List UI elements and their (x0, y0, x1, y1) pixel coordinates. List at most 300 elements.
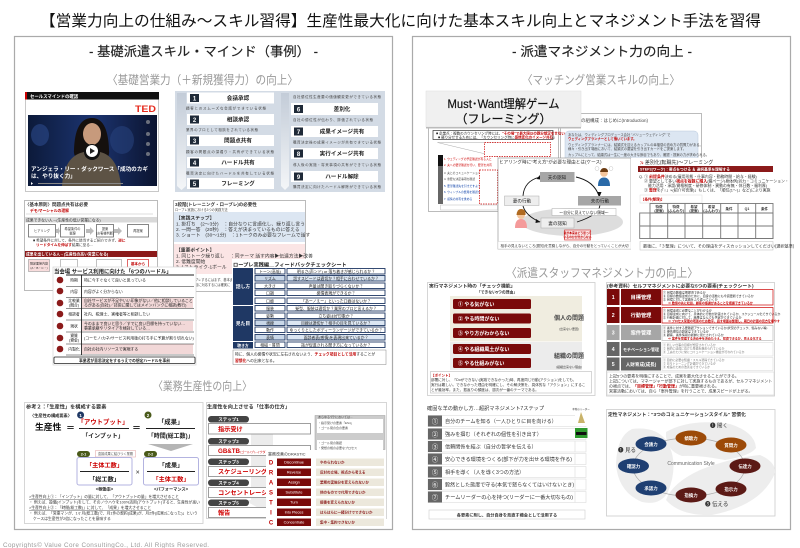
panel: role play necessity: ：同テーマ 話す内容▶伝達方法▶改善 (230, 252, 313, 260)
video thumbnail: アンジェラ・リー・ダックワース「成功のカギ (31, 165, 148, 173)
panel: 9 step sales process: 問題点共有 (224, 136, 252, 144)
panel: seven hurdles: ろがある(自社)／技術に関してはメインバンクに相談(教行) (84, 302, 187, 308)
panel: self management five elements: ② 目標の数値達成のために、自身の活動にも今週更新できているか (663, 293, 754, 298)
slide: differentiation framing (631, 158, 795, 250)
panel: role play necessity (174, 200, 313, 292)
panel: productivity elements: ＝ (66, 423, 75, 433)
panel: role play feedback sheet: 明るさ(声ンド) or 落ち着きが感じられるか？ (297, 269, 375, 274)
panel: role play necessity: 【実践ステップ】 (176, 214, 214, 222)
panel: role play necessity: ロープレ実施における3つの実践方法 (175, 207, 228, 212)
panel: communication style: 確認力 (627, 463, 641, 470)
slide: why hearing needs perspectives (498, 158, 631, 249)
panel: role play feedback sheet: 見た目 (236, 320, 250, 327)
slide: why hearing needs perspectives: 夫の行動 (591, 198, 610, 204)
panel: self management five elements: ② 日々トレーニング計画ができているか (663, 360, 716, 366)
panel: productivity elements: 〈生産性の構成要素〉 (30, 412, 72, 419)
panel: seven steps of management: チームリーダーの心を持つ(リーダーに一番大切なもの) (445, 494, 573, 501)
panel: execution management check: 個人の問題 (554, 314, 584, 322)
panel: execution management check: 部署に対し、「Doができない(実践できなかった)時、再度同じ行動(アクション)をしても、 (431, 377, 576, 382)
panel: productivity elements: 「時間(総工数)」 (148, 432, 194, 440)
panel: productivity elements: >生産性向上①：「インプット」の量に対して、「アウトプットの量」を増大させること (29, 494, 179, 499)
panel: self management five elements: ① 目標達成に必要なことがわかるか (663, 308, 712, 312)
slide: differentiation framing: Q1 (745, 207, 749, 211)
panel: productivity elements: 参考２：「生産性」を構成する要素 (26, 402, 107, 410)
panel: DRASTIC: 業務改善のDRASTIC (268, 450, 306, 456)
panel: self management five elements (606, 282, 780, 396)
slide: why hearing needs perspectives: 妻が本来はどう思って (564, 231, 592, 235)
panel: execution management check: 実行マネジメント時の「チェック機能」 (429, 282, 515, 290)
panel: self management five elements: ⇒ 案件を管理する決め手を決めたうえ、投資できるか、見える化する (668, 336, 762, 340)
panel: basic principles flow: (お客様判断) (96, 230, 114, 236)
panel: DRASTIC: A (269, 480, 274, 486)
panel: 9 step sales process: 成果イメージ共有 (320, 128, 365, 136)
panel: basic principles flow: デモ/マーシャルの理解 (30, 208, 69, 213)
panel: role play necessity: 2. 低難度開始 (176, 258, 206, 265)
panel: way of working: コンセントレーション (218, 490, 280, 497)
panel: communication style: 定性マネジメント："3つのコミュニケーションスタイル" 習慣化 (608, 411, 746, 418)
panel: role play feedback sheet: 話が促進される聞き方になっているか？ (301, 342, 371, 348)
panel: seven hurdles: 時期 (70, 278, 78, 282)
panel: basic principles flow: 希望条件の (65, 226, 80, 231)
panel: role play feedback sheet: リズム (264, 276, 276, 281)
heading: dispatch management: - 派遣マネジメント力の向上 - (512, 44, 692, 59)
panel: role play feedback sheet: 感情表現ができるか？ (317, 290, 355, 296)
panel: way of working: あらゆる"行"においては... (318, 414, 353, 419)
panel: 9 step sales process: 購買決定に向けたハードル解除ができている状態 (293, 184, 382, 189)
panel: execution management check: ② やる時間がない (458, 316, 499, 322)
panel: role play necessity: 1. 掛打ち (2～3分) ：自分なりに言語化し、繰り返し言う (176, 220, 305, 228)
panel: productivity elements: >生産性向上②：「時間(総工数)」に対して、「成果」を増大させること (29, 505, 151, 510)
panel: 9 step sales process (175, 91, 385, 192)
panel: way of working: ステップ2 (218, 438, 239, 445)
video thumbnail: は、やり抜く力」 (31, 172, 76, 180)
panel: role play feedback sheet: 話すスピードは適切か？相手に合わせているか？ (293, 276, 379, 281)
panel: role play necessity: 2. 一問一答 (20秒) ：答えが決まっているものに答える (176, 226, 300, 233)
panel: way of working: ・発想の幅の必要なプロセス (318, 445, 357, 450)
slide: differentiation framing: 特徴 (672, 204, 680, 209)
document: framing sheet: 2. 夫への要望確認を行い、要望を共有 (444, 163, 492, 167)
panel: communication style: ➊ 見る (618, 446, 636, 454)
slide: differentiation framing: 条件 (761, 206, 768, 211)
slide: differentiation framing: (ふんわり) (703, 208, 720, 213)
panel: role play necessity: 1. 同じトーク繰り返し (176, 252, 225, 260)
panel: execution management check: ③ やり方がわからない (458, 330, 509, 337)
panel: self management five elements: 2 (612, 313, 615, 319)
document: counseling introduction: あなたは、ウィディングプロデュース会社 "バリューウェディング" で (568, 132, 671, 137)
panel: productivity elements: <パフォーマンス> (154, 486, 189, 492)
slide: why hearing needs perspectives: ～自分に見えていない領域～ (559, 210, 609, 215)
panel: seven steps of management: ⑥ (432, 481, 439, 489)
slide: differentiation framing: (提案) (654, 208, 664, 213)
panel: communication style: 伝達力 (738, 463, 752, 470)
panel: DRASTIC: Into Pieces (285, 511, 303, 515)
panel: 9 step sales process: 実行イメージ共有 (320, 150, 365, 158)
panel: role play feedback sheet: 聴き方 (237, 343, 249, 348)
panel: role play necessity: 要に重要な項目に対応するには確実に (176, 282, 230, 287)
panel: 9 step sales process: ハードル解除 (325, 172, 359, 180)
document: framing sheet: 1. ウェディングの予定確認が有る人と (444, 157, 492, 161)
panel: self management five elements: ⇒ 数値の先に社員、顧客の感謝があることを把握できているか (668, 300, 753, 305)
panel: role play feedback sheet: トーン(高低) (259, 269, 282, 274)
title: 【営業力向上の仕組み～スキル習得】生産性最大化に向けた基本スキル向上とマネジメント手法を習得 (40, 12, 761, 30)
panel: role play feedback sheet: 目線は適切か？相手の目を見ているか？ (301, 320, 371, 326)
panel: role play feedback sheet: 特に、個人の感情や状況に左右されないよう、チェック項目として活用することが (235, 352, 375, 356)
panel: self management five elements: ② 優先順位の設定はできているか (663, 328, 709, 334)
panel: DRASTIC: S (269, 490, 273, 496)
panel: DRASTIC: やめられないか (320, 460, 345, 465)
panel: role play necessity: 3. 1ストライク-1ボール (176, 264, 227, 270)
panel: 9 step sales process: 業界のプロとして相談をされている状態 (186, 127, 258, 132)
subheading: matching sales: 〈マッチング営業スキルの向上〉 (522, 72, 680, 87)
document: counseling introduction (560, 114, 709, 199)
document: framing sheet: 6. ウィンプルの費用を確認する (444, 190, 484, 194)
document: counseling introduction: ウェディングプランナーには、結婚式を迎えるカップルの幸福感の高め方の質問力がある。 (568, 142, 703, 147)
panel: self management five elements: 4 (612, 347, 615, 353)
subheading: business productivity: 〈業務生産性の向上〉 (153, 379, 252, 393)
panel: self management five elements: ③ 顧客、案件情報の新鮮に見たされているか (663, 332, 724, 337)
document: counseling introduction: の組構成：はじめに(Introduction) (581, 117, 649, 124)
panel: 9 step sales process: 5 (193, 182, 197, 188)
panel: seven hurdles: 当会場 サービス利用に向けた「6つのハードル」 (54, 268, 172, 276)
panel: communication style: 会議力 (644, 441, 658, 448)
panel: role play feedback sheet: 「あーノえー」といった口癖はないか？ (301, 298, 371, 304)
panel: self management five elements: 営業活動においては、自ら「案件管理」を行うことで、成果スピードが上がる。 (609, 388, 753, 394)
panel: way of working: ・ゴール間の合の要素 (318, 425, 348, 430)
panel: basic principles flow: (A・B・C・) (30, 266, 48, 270)
slide: differentiation framing: STEP2(ワーク)：要点をつける ＆ 選択基準を理解する (640, 166, 730, 172)
panel: productivity elements: 生産性 (35, 421, 62, 432)
panel: productivity elements: 「アウトプット」 (77, 417, 129, 426)
panel: DRASTIC: R (269, 470, 274, 476)
panel: self management five elements: 3 (612, 330, 615, 336)
panel: productivity elements: ・ 例えば、設備(インプット)をして、そのノウハウを100%活用(アウトプット)すると、生産性が高い (29, 500, 200, 504)
panel: role play necessity: 3段階(トレーニング・ロープレ)の必要性 (175, 201, 257, 208)
panel: execution management check (428, 282, 595, 396)
panel: role play feedback sheet: 口調 (266, 290, 274, 296)
slide: why hearing needs perspectives: 相手の見えないところ(認知)を意識しながら、自分の行動をとっていくことが大切 (500, 243, 629, 248)
panel: execution management check: 実行は難しい。できなかった理由を明確にし、その解決策を、具体的な「アクション」にするこ (431, 382, 585, 387)
slide: differentiation framing: (ふんわり) (668, 208, 684, 213)
panel: role play feedback sheet: 髪型、服装は適切か？業界のプロと言えるか？ (295, 306, 377, 311)
video thumbnail: セールスマインドの確認 (30, 93, 79, 100)
slide: differentiation framing: 【条件(整理)】 (641, 196, 664, 202)
panel: communication style: 質問力 (724, 442, 738, 449)
panel: communication style: Communication Style (667, 461, 715, 467)
panel: self management five elements: ① 目標の数値は把握済であるか (663, 290, 706, 294)
icon: wife (515, 209, 527, 228)
panel: productivity elements: 2-1 (81, 452, 86, 456)
panel: seven hurdles: 内容 (70, 289, 78, 294)
panel: dispatch management (412, 36, 795, 530)
label: Must Want game: Must･Want理解ゲーム (448, 97, 560, 111)
slide: why hearing needs perspectives: いるのかが分からない (564, 235, 592, 239)
panel: 9 step sales process: 購買決定に向けたハードルを共有している状態 (186, 170, 274, 176)
panel: self management five elements: 上記については、マネージャーが部下に対して実施するものであるが、セルフマネジメント (609, 378, 772, 384)
document: counseling introduction: ウェディングプランナーとして働いています。 (568, 136, 636, 141)
panel: self management five elements: 人財育成(成長) (626, 361, 657, 368)
panel: productivity elements: <稼働率> (96, 486, 114, 492)
panel: 9 step sales process: フレーミング (221, 180, 255, 188)
panel: DRASTIC: Concentrate (284, 521, 304, 525)
panel: seven steps of management: 自分のチームを知る（一人ひとりに目を向ける） (445, 418, 557, 425)
document: framing sheet: 3. 夫とのコミュニケーション (444, 171, 481, 175)
panel: way of working: ・ゴール間の確認 (318, 440, 342, 445)
panel: productivity elements: 2-2 (148, 452, 153, 456)
panel: communication style: ➌ 伝える (705, 500, 728, 508)
panel: role play feedback sheet: 動作 (266, 328, 274, 332)
panel: DRASTIC: はらはらに一緒分けでできないか (320, 510, 373, 515)
panel: 9 step sales process: 3 (193, 139, 197, 145)
slide: differentiation framing: ② 要望として多い視点を複数に購入(職ページ)身体例)労力・コミュニケーション・ (644, 178, 789, 184)
slide: why hearing needs perspectives: 妻の認知 (548, 220, 567, 227)
panel: basic principles flow: 基本から (131, 261, 146, 266)
panel: DRASTIC: 他のものでで代用できないか (320, 490, 366, 495)
panel: 9 step sales process: 自社の優位性が伝わり、評価されている状態 (293, 117, 374, 122)
slide: differentiation framing: 特徴 (656, 204, 663, 209)
panel: 9 step sales process: 2 (193, 118, 197, 124)
panel: way of working: 指示受け (218, 426, 243, 434)
panel: self management five elements: 行動管理 (631, 311, 652, 319)
panel: basic principles flow (24, 200, 158, 290)
document: framing sheet: ■ 軽り分せせるためには、「カウンセリング時に感情変化のイメージ共有」 (438, 134, 557, 140)
panel: productivity elements: 「主体工数」 (86, 462, 123, 470)
panel: self management five elements: ③ 成長のための改善はできているか (663, 364, 710, 369)
panel: 9 step sales process: 顧客の問題点の深堀り・共有ができている状態 (186, 149, 274, 154)
panel: role play necessity: 【重要ポイント】 (176, 246, 214, 254)
panel: execution management check: 【ポイント】 (431, 372, 452, 378)
panel: seven hurdles: 事業承継やリタイアを検討している… (84, 326, 150, 330)
panel: way of working: スケジューリング (218, 468, 268, 476)
panel: basic principles flow: 成果を出している人→(生産性の高い営業になる) (26, 252, 109, 256)
panel: role play feedback sheet: 口癖 (266, 298, 274, 304)
panel: role play feedback sheet: 習慣化への出来となる。 (235, 358, 277, 363)
slide: differentiation framing: 能力活用・承認/資格制度・研修体制・異動の有無・休日数・福利厚) (648, 183, 768, 188)
slide: why hearing needs perspectives: ヒアリング時に"考え方"が必要な理由とは(ケース) (499, 158, 602, 166)
panel: 9 step sales process: ハードル共有 (221, 158, 255, 166)
panel: DRASTIC: 業務の実施分を変えられないか (320, 480, 369, 485)
document: framing sheet: 7. 感情の共有を進める (444, 197, 472, 201)
panel: seven hurdles: 社内、税理士、実権者等と相談したい (84, 312, 150, 316)
panel: self management five elements: ② 目標達成に向けて、具体的に行動が計画されているか、スケジュール化できているか (663, 311, 780, 316)
panel: role play feedback sheet: ロープレ実践編＿フィードバックチェックシート (233, 260, 347, 268)
panel: role play feedback sheet: 服装 (266, 306, 274, 311)
slide: differentiation framing: ﾌﾚ 差別化(転職先)～フレーミング (640, 159, 713, 166)
document: framing sheet: 5. 要望確認先を引きだすようになる (444, 184, 489, 188)
panel: self management five elements: ③ 目標に対して実績をふり返っていくか (663, 296, 718, 302)
panel: 9 step sales process: 4 (193, 161, 197, 167)
panel: seven steps of management: ② (432, 430, 439, 438)
icon: book (572, 406, 590, 438)
panel: 9 step sales process: 相談承認 (227, 116, 250, 124)
panel: DRASTIC: Discontinue (284, 461, 304, 465)
panel: seven steps of management: 各要素に則し、自分自身を見直す機会として活用する (457, 512, 557, 518)
panel: way of working: GB&TB(ゴール/ブレイクダウン) (218, 448, 273, 455)
panel: 9 step sales process: 8 (297, 152, 301, 158)
panel: 9 step sales process: 自社優位性生産要の価値観変更ができている状態 (293, 94, 382, 99)
panel: basic principles flow: 再提案 (133, 228, 144, 233)
panel: seven hurdles: 自社サービスが不足やいい印象がない／他に相談していること (84, 298, 193, 303)
slide: differentiation framing: 条件 (726, 206, 733, 211)
panel: self management five elements: (参考資料）セルフマネジメントに必要な5つの要素(チェックシート) (607, 282, 754, 290)
panel: productivity elements: × (136, 470, 140, 476)
panel: 9 step sales process: 購買決定後の成果イメージが共有できている状態 (293, 140, 382, 144)
slide: differentiation framing: 希望 (708, 204, 716, 209)
panel: self management five elements: ③ 行動計画に対して、結果はなんでも予定ができているか (663, 314, 741, 320)
panel: productivity elements: ＝ (132, 423, 141, 433)
panel: execution management check: (組織出来ない理由) (556, 364, 582, 369)
panel: self management five elements: ① 案件に対する要確認アクションできているか(状況のチェック、悩みない等) (663, 325, 767, 330)
panel: role play feedback sheet: 話し方 (236, 283, 250, 290)
panel: seven hurdles: 今のままで良いと思う／すでに良い目標を持っていない… (84, 321, 185, 326)
panel: role play feedback sheet: ゆっくりとしたボディーランゲージができているか？ (289, 328, 383, 332)
panel: 9 step sales process: 7 (297, 130, 301, 136)
panel: communication style: 傾聴力 (684, 435, 698, 442)
video thumbnail (25, 92, 159, 192)
panel: seven steps of management: 安心できる環境をつくる(部下が力を出せる環境を作る) (445, 456, 572, 463)
panel: DRASTIC: Turn (290, 501, 298, 505)
subheading: basic sales: 〈基礎営業力（＋新規獲得力）の向上〉 (107, 72, 298, 87)
panel: basic principles flow: 限定面接内容 (30, 260, 48, 266)
label: Must Want game: （フレーミング） (455, 112, 552, 126)
panel: seven steps of management: 強みを掴む（それぞれの個性を引き出す） (445, 431, 542, 438)
slide: differentiation framing: 最後に、「３整理」について、その理由をディスカッションしてください(選択基準) (643, 242, 795, 248)
panel: DRASTIC: 順番を変えられないか (320, 500, 355, 505)
panel: self management five elements: 案件管理 (631, 328, 652, 336)
panel: DRASTIC: I (270, 510, 272, 516)
panel: execution management check: ④ やる組織風土がない (458, 346, 509, 353)
panel: productivity elements (24, 402, 203, 524)
panel: seven steps of management: ⑤ (432, 468, 439, 476)
slide: differentiation framing: 希望 (690, 204, 698, 209)
panel: 9 step sales process: 9 (297, 175, 301, 181)
subheading: staff management: 〈派遣スタッフマネジメント力の向上〉 (506, 265, 698, 280)
panel: seven steps of management: ④ (432, 456, 439, 464)
panel: execution management check: 組織の問題 (554, 352, 584, 360)
panel: seven hurdles: 資質 (70, 333, 78, 338)
panel: seven hurdles: 内製化 (68, 346, 80, 352)
panel: productivity elements: 「成果」 (158, 417, 183, 426)
panel: role play feedback sheet (232, 259, 387, 365)
panel: self management five elements: ③ 工夫のたびに常にコミュニケーション機会が行われているか (663, 349, 745, 354)
panel: seven steps of management: ⑦ (432, 494, 439, 502)
panel: DRASTIC (266, 450, 386, 527)
panel: self management five elements: モチベーション管理 (623, 346, 659, 352)
panel: productivity elements: 2 (147, 413, 150, 418)
panel: seven hurdles: 特に今すぐなくて良いと思っている (84, 278, 146, 282)
panel: basic principles flow: ■ 希望条件に対して、条件に該当するご紹介できず、逆に (33, 238, 126, 242)
slide: differentiation framing: ③ 整理を(「○」×(紹介可否理)」もしくは、「順位(1～)」など)により実施 (644, 188, 771, 192)
panel: seven hurdles: 相談者 (68, 312, 80, 316)
panel: 9 step sales process: 1 (193, 96, 197, 102)
panel: seven hurdles: 現状 (70, 324, 78, 328)
panel: execution management check: とが最効率。また、振返りの頻度は、週次が一番のテーマである。 (431, 387, 539, 392)
icon: husband (595, 166, 613, 186)
panel: 9 step sales process: 6 (297, 108, 301, 114)
icon: book: 本物のリーダー (572, 407, 590, 411)
panel: productivity elements: 「成果」 (159, 462, 183, 470)
panel: DRASTIC: Assign (288, 481, 300, 485)
panel: execution management check: ① やる気がない (458, 301, 494, 308)
panel: productivity elements: ・ 例えば、「営業マンが、1ヶ月(総工数)で、月1件の契約(成果)が、月2件(成果2になった)」という (29, 510, 198, 516)
panel: 9 step sales process: 差別化 (334, 105, 351, 113)
slide: differentiation framing: Q. ① 前提条件決める(雇用形態・仕事内容・勤務時間・給与・経験) (639, 174, 758, 179)
panel: 9 step sales process: 導入後の実施・将来事項の共有ができている状態 (293, 162, 382, 167)
panel: DRASTIC: C (269, 520, 274, 526)
document: framing sheet: ■ 企業点：複数のカウンセリング時には、"その場"で最大限以の親分想定をせない (436, 130, 565, 136)
panel: seven hurdles (53, 267, 196, 365)
video thumbnail: TED (135, 104, 156, 115)
panel: seven hurdles: 内容がよく分からない (84, 289, 123, 294)
panel: way of working: ステップ5 (218, 500, 239, 506)
panel: way of working: ステップ3 (218, 458, 239, 466)
panel: basic principles flow: 提案 (102, 226, 109, 231)
panel: communication style: 承認力 (644, 485, 658, 492)
panel: productivity elements: 直接成果に結びつく業務 (98, 451, 134, 456)
panel: DRASTIC: T (269, 500, 273, 506)
panel: role play feedback sheet: 大きさ (264, 284, 276, 288)
panel: role play necessity: 3. ショート (30～1分) ：1トークのみ必要なフレームで話す (176, 232, 310, 238)
panel: basic skills and mind (14, 36, 392, 530)
panel: seven steps of management: ① (432, 418, 439, 426)
panel: execution management check: 「できない5つの理由」 (477, 290, 517, 294)
panel: basic principles flow: 成果できない人→(生産性の低い営業になる) (26, 218, 101, 222)
panel: way of working: ステップ1 (218, 416, 239, 423)
panel: role play feedback sheet: 立ち姿は好印象か？ (318, 314, 354, 318)
panel: self management five elements: の視点では、「目標管理」「行動管理」が特に重要視される。 (609, 382, 719, 388)
panel: productivity elements: 「インプット」 (82, 433, 124, 440)
document: counseling introduction: カップルにとって、結婚式は一生に一度の大きな節目でもあり、確認・提案の力が求められる。 (568, 152, 709, 157)
label: Must Want game (426, 91, 581, 128)
panel: seven hurdles: (コーモノ/カネ/サービス利用後の打ち手に予算が割り切れない) (84, 336, 195, 340)
panel: DRASTIC: 集中・集約できないか (320, 520, 355, 525)
panel: execution management check: ⑤ やる仕組みがない (458, 360, 504, 367)
panel: role play feedback sheet: 相槌・質問 (260, 342, 280, 348)
panel: communication style: 指摘力 (684, 492, 698, 499)
panel: seven steps of management (427, 404, 590, 519)
panel: DRASTIC: Substitute (286, 491, 302, 495)
document: counseling introduction: 様々・引き出す場面において、結婚式の要望を引き出すカードをご提案します。 (568, 146, 686, 151)
panel: self management five elements: 1 (612, 295, 615, 301)
panel: way of working (206, 402, 386, 527)
panel: self management five elements: ② 目的に達成に向けた準備を進められているか (663, 346, 725, 350)
panel: 9 step sales process: 会話承認 (227, 94, 250, 102)
panel: seven hurdles: (競合) (69, 302, 80, 308)
panel: productivity elements: 「主体工数」 (152, 476, 190, 484)
panel: basic principles flow: ヒアリング (34, 228, 51, 233)
panel: role play feedback sheet: 姿勢 (266, 314, 274, 318)
panel: 9 step sales process: 顧客とのスムーズな会話ができている状態 (186, 106, 266, 110)
slide: differentiation framing: (提案) (689, 208, 699, 213)
panel: way of working: 報告 (218, 509, 230, 517)
panel: seven steps of management: ③ (432, 443, 439, 451)
panel: way of working: ステップ4 (218, 480, 239, 486)
document: framing sheet: 4. 重要な決定事項を確認 (444, 177, 475, 181)
panel: way of working: ・指示受けの要素「ES4」 (318, 420, 354, 425)
panel: self management five elements: ① 目的に必要な知識・スキル習得できているか (663, 357, 725, 362)
panel: seven hurdles: 比較業 (68, 298, 80, 303)
panel: self management five elements: 目標管理 (631, 293, 652, 301)
panel: seven steps of management: 相手を導く（人を導く3つの方法） (445, 469, 524, 476)
panel: self management five elements: ⇒ プロセス管理の改善のため数字、話す場面は整理し、期日の計画の見方を増やす (668, 318, 780, 323)
panel: basic principles flow: 整理 (69, 230, 76, 236)
panel: seven steps of management: 毅然とした態度で守る(本気で怒らなくてはいけないとき) (445, 482, 574, 488)
panel: execution management check: (出来ない要因) (559, 326, 579, 331)
panel: productivity elements: 「総工数」 (89, 476, 120, 484)
panel: role play feedback sheet: 表情 (266, 335, 274, 340)
panel: role play feedback sheet: 声量は聞き取りづらくないか？ (309, 284, 363, 288)
panel: seven hurdles: 自社の社内リソースで実現する (84, 346, 138, 352)
panel: self management five elements: ① 新しい仕事の目標が想定されているか (663, 342, 716, 347)
